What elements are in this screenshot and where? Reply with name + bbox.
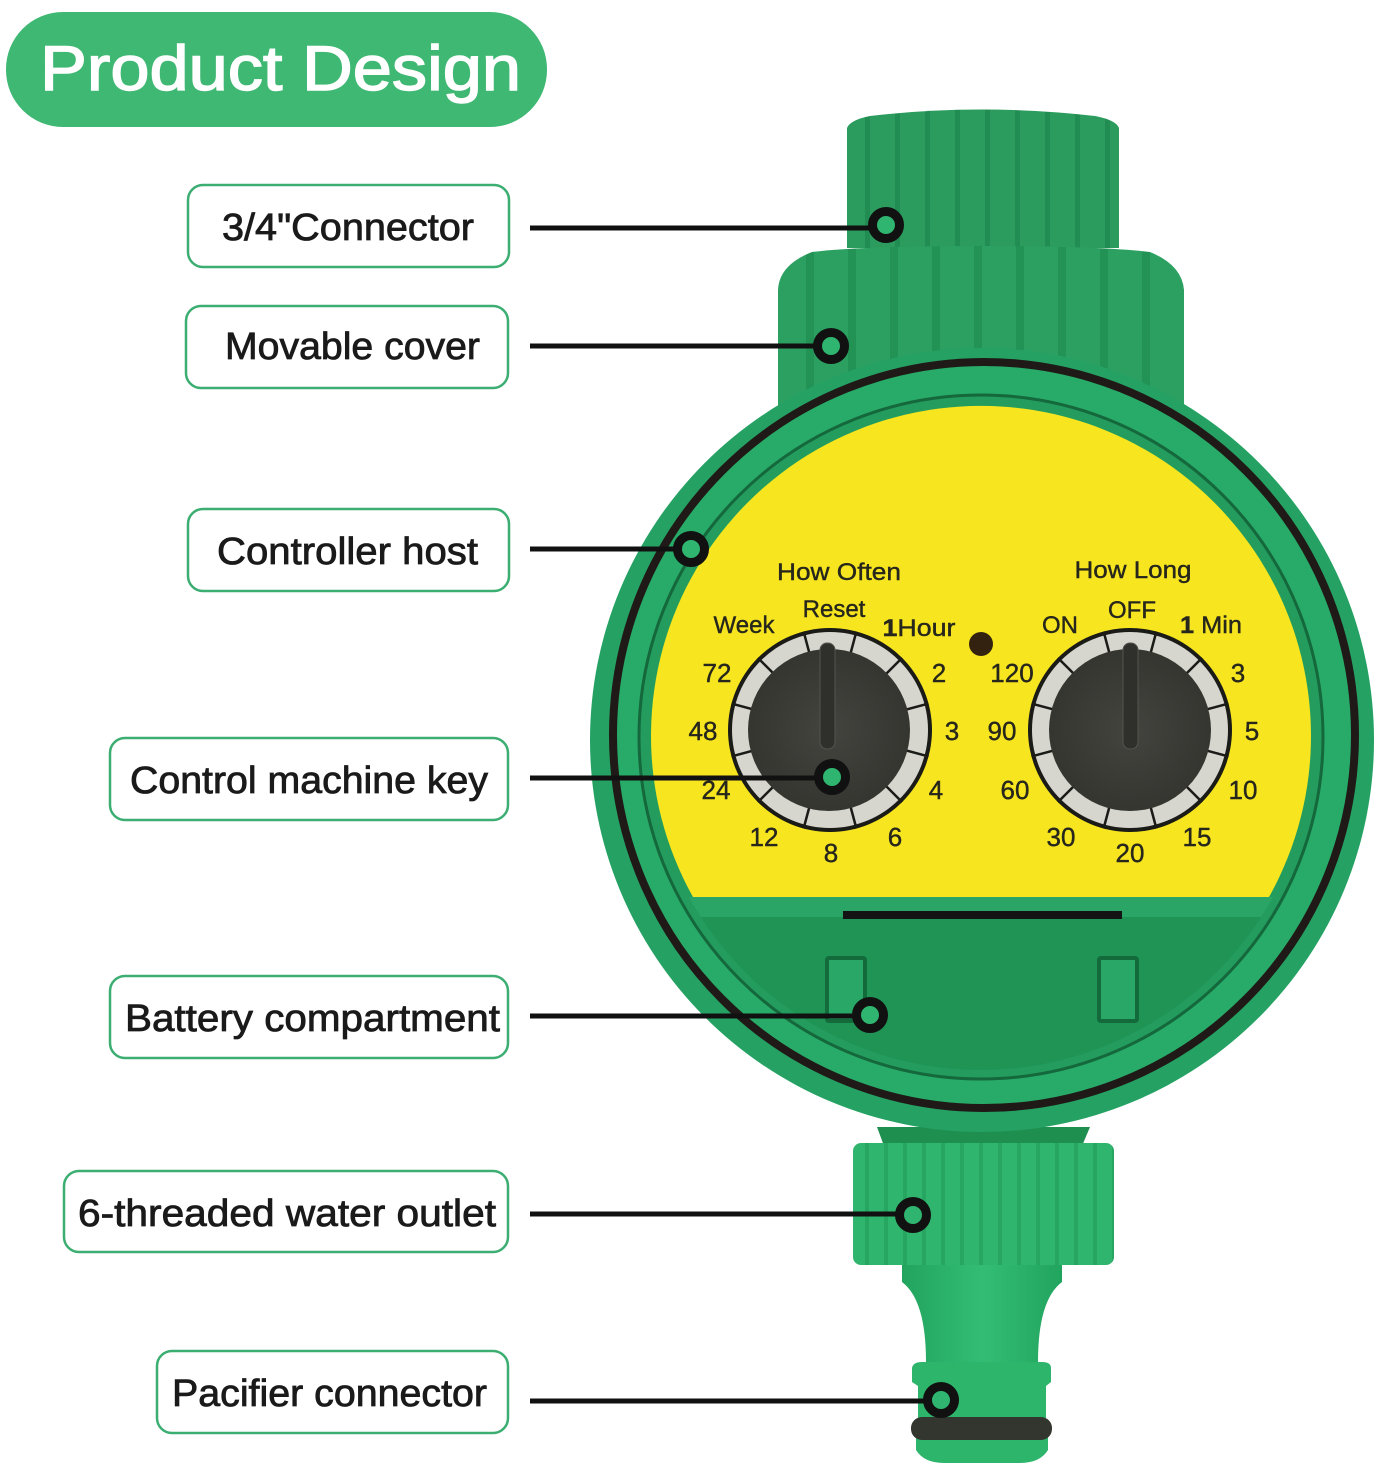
- dial labels: how long: 30: [1047, 822, 1075, 852]
- callout: movable cover: Movable cover: [225, 326, 480, 368]
- dial labels: how often: 72: [703, 658, 731, 688]
- title: Product Design: [40, 34, 521, 104]
- inner ring: [639, 395, 1323, 1079]
- dial labels: how often: 1Hour: [882, 615, 956, 642]
- indicator led: [969, 632, 993, 656]
- callout: movable cover: [186, 306, 844, 388]
- pacifier tip: [916, 1436, 1048, 1463]
- dial labels: how long: OFF: [1108, 597, 1156, 624]
- title: [6, 12, 547, 127]
- dial labels: how often: 3: [945, 716, 959, 746]
- callout: 3/4" connector: [188, 185, 900, 267]
- pacifier connector body: [902, 1265, 1062, 1362]
- dial labels: how often: 12: [750, 822, 778, 852]
- top connector: [847, 110, 1119, 248]
- callout: 3/4" connector: 3/4"Connector: [222, 207, 474, 249]
- black gasket ring: [613, 362, 1355, 1108]
- o-ring: [911, 1417, 1052, 1440]
- movable cover: [778, 246, 1184, 410]
- dial labels: how long: 120: [990, 658, 1034, 688]
- callout: control machine key: [110, 738, 846, 820]
- yellow faceplate: [651, 406, 1311, 897]
- dial labels: how long: 20: [1116, 838, 1144, 868]
- dial labels: how long: 15: [1183, 822, 1211, 852]
- callout: pacifier connector: Pacifier connector: [172, 1373, 487, 1415]
- dial labels: how often: 2: [932, 658, 946, 688]
- dial labels: how long: 5: [1245, 716, 1259, 746]
- dial labels: how long: 10: [1229, 775, 1257, 805]
- callout: 6-threaded water outlet: [64, 1171, 926, 1252]
- callout: 6-threaded water outlet: 6-threaded water outlet: [78, 1193, 496, 1235]
- dial labels: how often: 6: [888, 822, 902, 852]
- dial labels: how long: 90: [988, 716, 1016, 746]
- dial labels: how often: Reset: [803, 596, 866, 623]
- lower thread: [877, 1127, 1090, 1146]
- battery slit: [843, 911, 1122, 919]
- left slot: [827, 958, 865, 1021]
- dial labels: how long: 3: [1231, 658, 1245, 688]
- dial labels: how often: 24: [702, 775, 730, 805]
- dial labels: how long: [988, 557, 1259, 868]
- pacifier collar: [912, 1362, 1051, 1418]
- dial labels: how often: 4: [929, 775, 943, 805]
- right knob: [1028, 628, 1232, 832]
- dial labels: how long: ON: [1042, 612, 1078, 639]
- dial labels: how long: How Long: [1074, 557, 1192, 584]
- callout: controller host: [188, 509, 704, 591]
- main body: [590, 348, 1374, 1132]
- dial labels: how long: 60: [1001, 775, 1029, 805]
- dial labels: how often: Week: [714, 612, 775, 639]
- dial labels: how often: How Often: [777, 559, 901, 586]
- callout: control machine key: Control machine key: [130, 760, 488, 802]
- callout: pacifier connector: [157, 1351, 954, 1433]
- left knob: [728, 628, 932, 832]
- callout: battery compartment: [110, 976, 884, 1058]
- device: water timer: [590, 110, 1374, 1463]
- callout: controller host: Controller host: [217, 531, 478, 573]
- dial labels: how long: 1 Min: [1180, 612, 1242, 639]
- right slot: [1099, 958, 1137, 1021]
- dial labels: how often: 8: [824, 838, 838, 868]
- dial labels: how often: 48: [689, 716, 717, 746]
- water outlet nut: [853, 1143, 1114, 1265]
- callout: battery compartment: Battery compartment: [125, 998, 500, 1040]
- battery compartment panel: [690, 897, 1272, 1070]
- dial labels: how often: [689, 559, 959, 868]
